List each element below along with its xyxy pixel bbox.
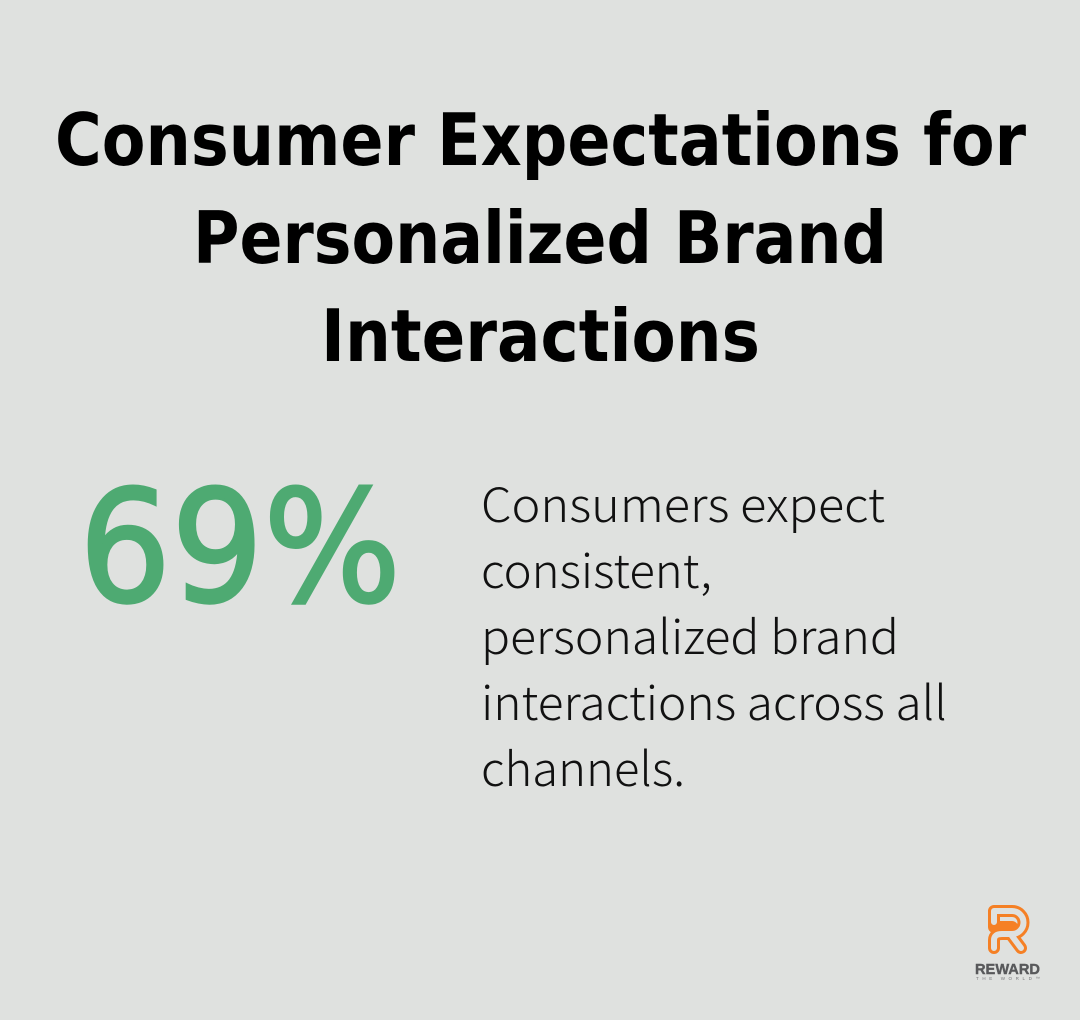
icon: orange R mark bbox=[994, 911, 1024, 948]
wordmark: REWARD bbox=[975, 961, 1040, 978]
description text: consistent, bbox=[481, 533, 712, 602]
description text bbox=[481, 467, 947, 800]
description text: interactions across all bbox=[481, 665, 947, 734]
tagline: THE WORLD™ bbox=[976, 976, 1040, 981]
title: Personalized Brand bbox=[193, 196, 887, 280]
description text: channels. bbox=[481, 731, 685, 800]
title: Interactions bbox=[321, 294, 760, 378]
title bbox=[55, 98, 1026, 378]
logo: Reward the World bbox=[975, 911, 1040, 981]
description text: personalized brand bbox=[481, 599, 899, 668]
statistic: 69%: 69% bbox=[79, 457, 401, 638]
description text: Consumers expect bbox=[481, 467, 885, 536]
